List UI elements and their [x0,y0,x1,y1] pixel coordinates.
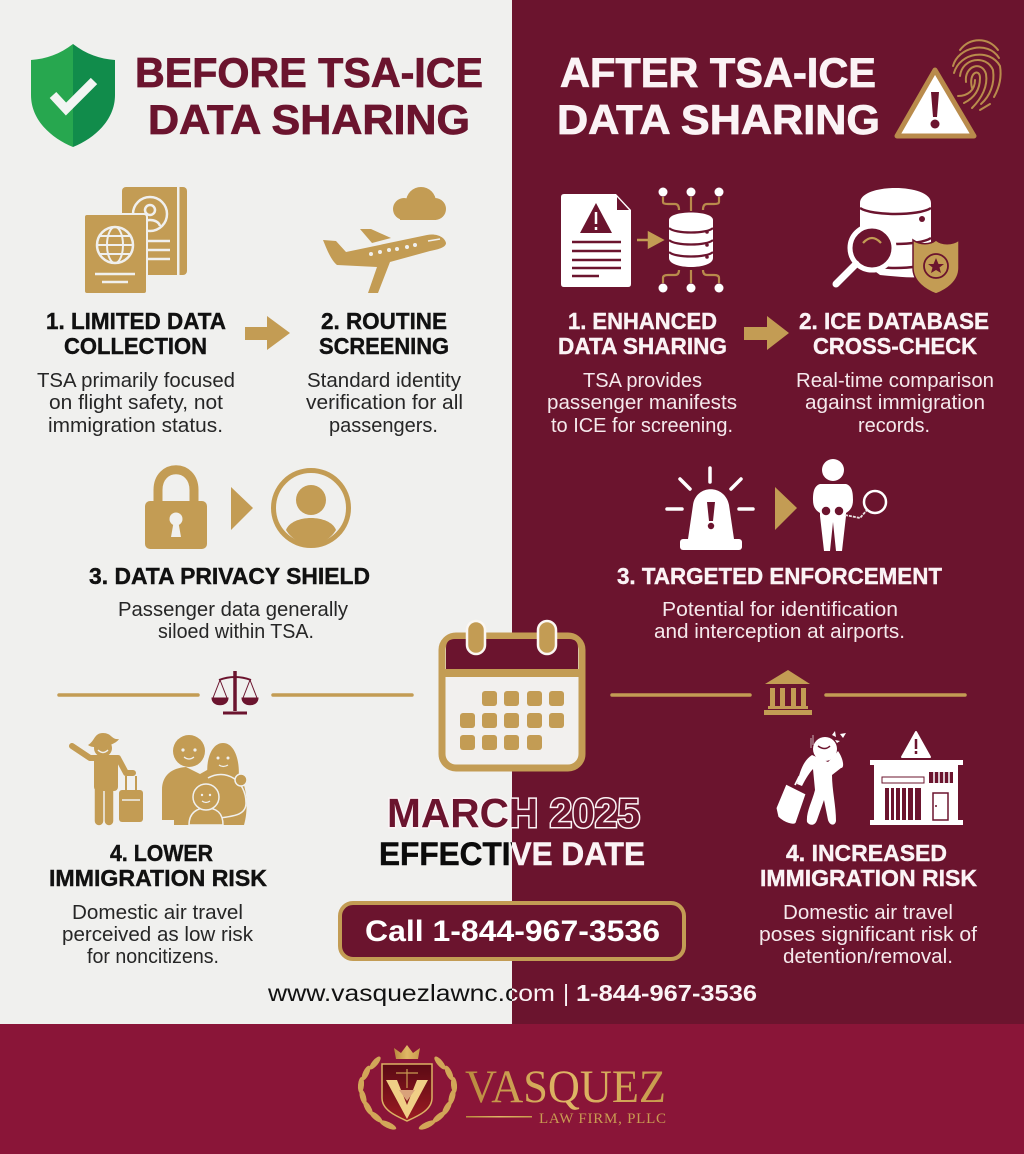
item 2: routine screening: Standard identity [307,369,462,392]
divider with scales [59,671,412,713]
icon: laurel wreath [357,1055,458,1132]
item 4: lower immigration risk: IMMIGRATION RISK [49,865,267,891]
item 1: enhanced data sharing: passenger manifests [547,391,737,414]
item 3: data privacy shield [89,563,370,643]
item 3: targeted enforcement [617,563,942,643]
arrow: lock to person [231,487,253,530]
icon: crown [394,1045,420,1059]
item 1: enhanced data sharing: TSA provides [583,369,702,392]
item 1: limited data collection: COLLECTION [64,333,207,359]
panel: after TSA-ICE data sharing [547,40,1001,968]
icon: flagged document [561,194,631,287]
item 2: ICE database cross-check: CROSS-CHECK [813,333,977,359]
item 1: limited data collection: on flight safety, not [49,391,223,414]
icon: alarm siren [667,468,753,550]
heading: before: DATA SHARING [148,96,470,143]
icon: calendar [442,621,582,768]
icon: smiling traveler with suitcase [72,733,143,822]
heading: after: DATA SHARING [557,96,880,143]
icon: fingerprint [953,40,1001,110]
item 1: enhanced data sharing: DATA SHARING [558,333,727,359]
website and phone line: www.vasquezlawnc.com [267,980,555,1006]
footer logo: Vasquez Law Firm [357,1045,666,1132]
background: before side [0,0,512,1024]
icon: handcuffed person [813,459,886,551]
item 2: ICE database cross-check: records. [858,414,930,437]
item 3: targeted enforcement: Potential for identification [662,598,898,621]
item 3: targeted enforcement: 3. TARGETED ENFORCEMENT [617,563,942,589]
label: effective date [380,842,644,866]
icon: green shield with check [31,44,115,147]
item 2: ICE database cross-check [796,308,994,437]
item 1: limited data collection [37,308,235,437]
item 2: ICE database cross-check: Real-time comparison [796,369,994,392]
icon: plane and cloud [323,187,446,293]
icon: courthouse [764,670,812,715]
item 3: data privacy shield: siloed within TSA. [158,620,314,643]
icon: padlock [145,470,207,549]
call button [340,903,684,959]
item 2: routine screening: 2. ROUTINE [321,308,447,334]
item 2: ICE database cross-check: against immigration [805,391,985,414]
icon: passports [84,187,187,294]
tagline: LAW FIRM, PLLC [539,1111,666,1127]
item 4: lower immigration risk: Domestic air travel [72,901,243,924]
icon: crest shield [382,1064,432,1121]
website and phone line [268,984,756,1006]
item 2: routine screening: SCREENING [319,333,449,359]
icon: networked database [658,188,724,292]
background: after side [512,0,1024,1024]
label: effective date: EFFECTIVE DATE [379,836,645,872]
item 4: increased immigration risk: Domestic air travel [783,901,953,924]
icon: scales of justice [212,671,258,713]
icon: distressed traveler [776,731,846,825]
item 3: data privacy shield: 3. DATA PRIVACY SHIELD [89,563,370,589]
icon: family [162,735,247,825]
arrow: step 1 to 2 [744,316,789,350]
icon: detention facility [870,732,963,825]
item 4: increased immigration risk: IMMIGRATION RISK [760,865,977,891]
item 4: increased immigration risk: detention/removal. [783,945,953,968]
item 4: lower immigration risk: for noncitizens. [87,945,219,968]
item 4: increased immigration risk: 4. INCREASED [786,840,947,866]
label: effective date: EFFECTIVE DATE [379,836,645,872]
item 4: increased immigration risk [759,840,977,968]
item 2: ICE database cross-check: 2. ICE DATABASE [799,308,989,334]
item 4: lower immigration risk: 4. LOWER [110,840,213,866]
icon: database with magnifier and badge [836,188,959,294]
icon: person in circle [274,470,348,546]
item 2: routine screening: passengers. [329,414,438,437]
website and phone line: 1-844-967-3536 [576,980,757,1006]
arrow: step 1 to 2 [245,316,290,350]
item 1: limited data collection: TSA primarily focused [37,369,235,392]
item 2: routine screening: verification for all [306,391,463,414]
wordmark rule [466,1116,532,1118]
item 3: data privacy shield: Passenger data generally [118,598,349,621]
item 1: limited data collection: 1. LIMITED DATA [46,308,226,334]
item 1: limited data collection: immigration status. [48,414,223,437]
icon: warning triangle [897,70,974,136]
heading: before [135,49,483,143]
item 4: lower immigration risk: perceived as low risk [62,923,254,946]
panel: before TSA-ICE data sharing [31,44,483,968]
website and phone line: www.vasquezlawnc.com [267,980,555,1006]
item 1: enhanced data sharing: to ICE for screening. [551,414,733,437]
divider with courthouse [612,670,965,715]
arrow: siren to person [775,487,797,530]
arrow: document to database [637,233,662,247]
item 1: enhanced data sharing [547,308,737,437]
item 1: enhanced data sharing: 1. ENHANCED [568,308,717,334]
footer band [0,1024,1024,1154]
website and phone line: | [563,980,569,1006]
wordmark: VASQUEZ [465,1061,666,1113]
heading: before: BEFORE TSA-ICE [135,49,483,96]
item 4: lower immigration risk [49,840,267,968]
heading: after [557,49,880,143]
item 2: routine screening [306,308,463,437]
item 4: increased immigration risk: poses significant risk of [759,923,977,946]
call button: Call 1-844-967-3536 [365,915,660,948]
heading: after: AFTER TSA-ICE [560,49,876,96]
date: March 2025: MARCH 2025 [387,790,640,836]
item 3: targeted enforcement: and interception at airports. [654,620,905,643]
